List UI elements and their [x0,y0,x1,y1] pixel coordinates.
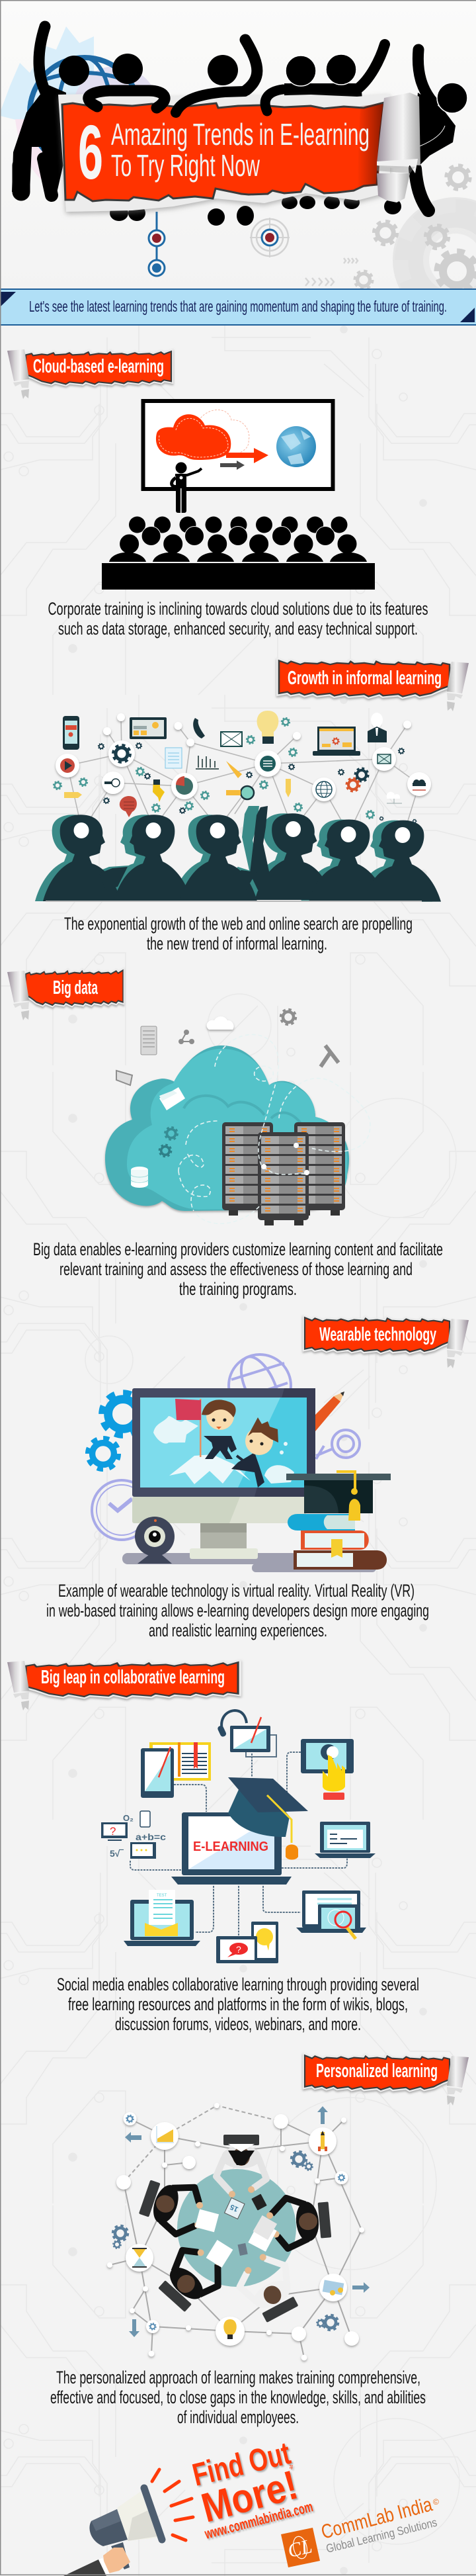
cloud [105,1045,349,1211]
stick figures behind banner [12,26,467,226]
section 3 text [33,1239,443,1299]
device: search laptop [296,1890,366,1939]
left quiz cluster: 5√‾ [110,1848,124,1859]
hands over banner [89,89,283,112]
Find Out More text [189,2436,315,2542]
Find Out More text: Find Out [189,2436,294,2493]
dashed data paths [178,1034,370,1223]
CommLab India logo: CL [286,2535,314,2562]
left quiz cluster: O₂ [123,1813,134,1823]
audience [109,516,367,562]
section 2 text: the new trend of informal learning. [147,934,327,954]
lavender background icons [92,1351,360,1540]
left quiz cluster [101,1811,166,1859]
heading banner [279,660,469,711]
table items: 15 [229,2203,239,2213]
webcam [135,1517,175,1564]
intro band [0,289,476,326]
seated people [136,2135,332,2326]
device: email test laptop [124,1890,200,1946]
heading banner [7,970,123,1020]
CommLab India logo: Global Learning Solutions [325,2516,438,2555]
header backdrop: clouds and globe [0,26,159,189]
heading banner [7,1661,238,1710]
device: small laptop right [315,1822,376,1858]
CommLab India logo [281,2493,439,2567]
desk [102,563,375,590]
target [250,218,290,257]
left quiz cluster: ? [110,1825,116,1838]
round table [177,2169,296,2287]
title [78,109,370,195]
server racks [222,1122,345,1225]
cloud icons [131,1087,185,1188]
screen cartoon [153,1399,294,1488]
CommLab India logo: CommLab India [319,2493,434,2544]
device: book and tablet [141,1742,211,1798]
section 3 text: the training programs. [179,1279,297,1299]
section 1 text [48,599,428,639]
megaphone [63,2488,162,2576]
device: question tablet and phone [216,1922,278,1963]
table items [195,2194,277,2268]
section 3: big data [7,970,370,1225]
presenter [172,462,202,513]
header panel [0,26,476,313]
heading banner: Big data [53,977,99,999]
monitor [122,1388,315,1564]
heading banner: Big leap in collaborative learning [41,1667,225,1688]
central laptop: E-LEARNING [193,1840,268,1854]
books and cap [252,1472,391,1572]
pencil [315,1392,344,1431]
blue gears and arrows [112,2106,370,2337]
section 4: wearable technology [87,1317,469,1572]
section 6 text [50,2368,426,2427]
heading banner [7,349,171,399]
heading banner [305,2055,469,2106]
floating icons [54,711,416,823]
gears and chevrons [305,165,476,313]
call to action [63,2436,439,2576]
device: question tablet and phone: ? [236,1944,241,1955]
section 4 text: and realistic learning experiences. [149,1621,327,1640]
node icons [132,2126,344,2339]
white data points [261,1143,309,1175]
section 6: personalized learning [107,2055,469,2361]
heading banner: Cloud-based e-learning [33,356,164,377]
node icons [60,745,426,797]
presentation screen [143,401,333,489]
section 1: cloud-based e-learning [7,349,375,590]
Find Out More text: More! [197,2462,303,2532]
section 2 text [64,914,413,954]
network nodes [56,713,431,801]
sound rays [152,2469,193,2540]
section 4 text [46,1581,429,1640]
device: tablet with hand [301,1739,354,1800]
circuit nodes [149,212,165,276]
section 6 text: of individual employees. [177,2407,299,2427]
network nodes [107,2103,364,2361]
device: email test laptop: TEST [157,1894,167,1898]
Find Out More text: at [288,2464,294,2469]
section 2: growth in informal learning [35,660,469,902]
dashed connectors [130,1752,347,1936]
blue gears [87,1393,144,1469]
title line 2: To Try Right Now [111,148,260,183]
silhouettes [35,806,441,902]
network lines [67,717,419,827]
numeral 6: 6 [78,109,103,195]
banner peel [377,93,420,202]
Find Out More text: www.commlabindia.com [202,2498,315,2542]
torn red banner [58,94,390,212]
device: top tablet with headset [217,1710,276,1757]
CommLab India logo: © [433,2497,439,2507]
section 5 text [57,1975,419,2034]
section 5: big leap in collaborative learning [7,1661,376,1963]
left quiz cluster: a+b=c [136,1832,166,1842]
graduation cap [228,1777,308,1859]
network links [110,2106,362,2358]
floating grey icons [116,1010,338,1085]
heading banner [305,1317,469,1368]
central laptop [171,1812,292,1885]
